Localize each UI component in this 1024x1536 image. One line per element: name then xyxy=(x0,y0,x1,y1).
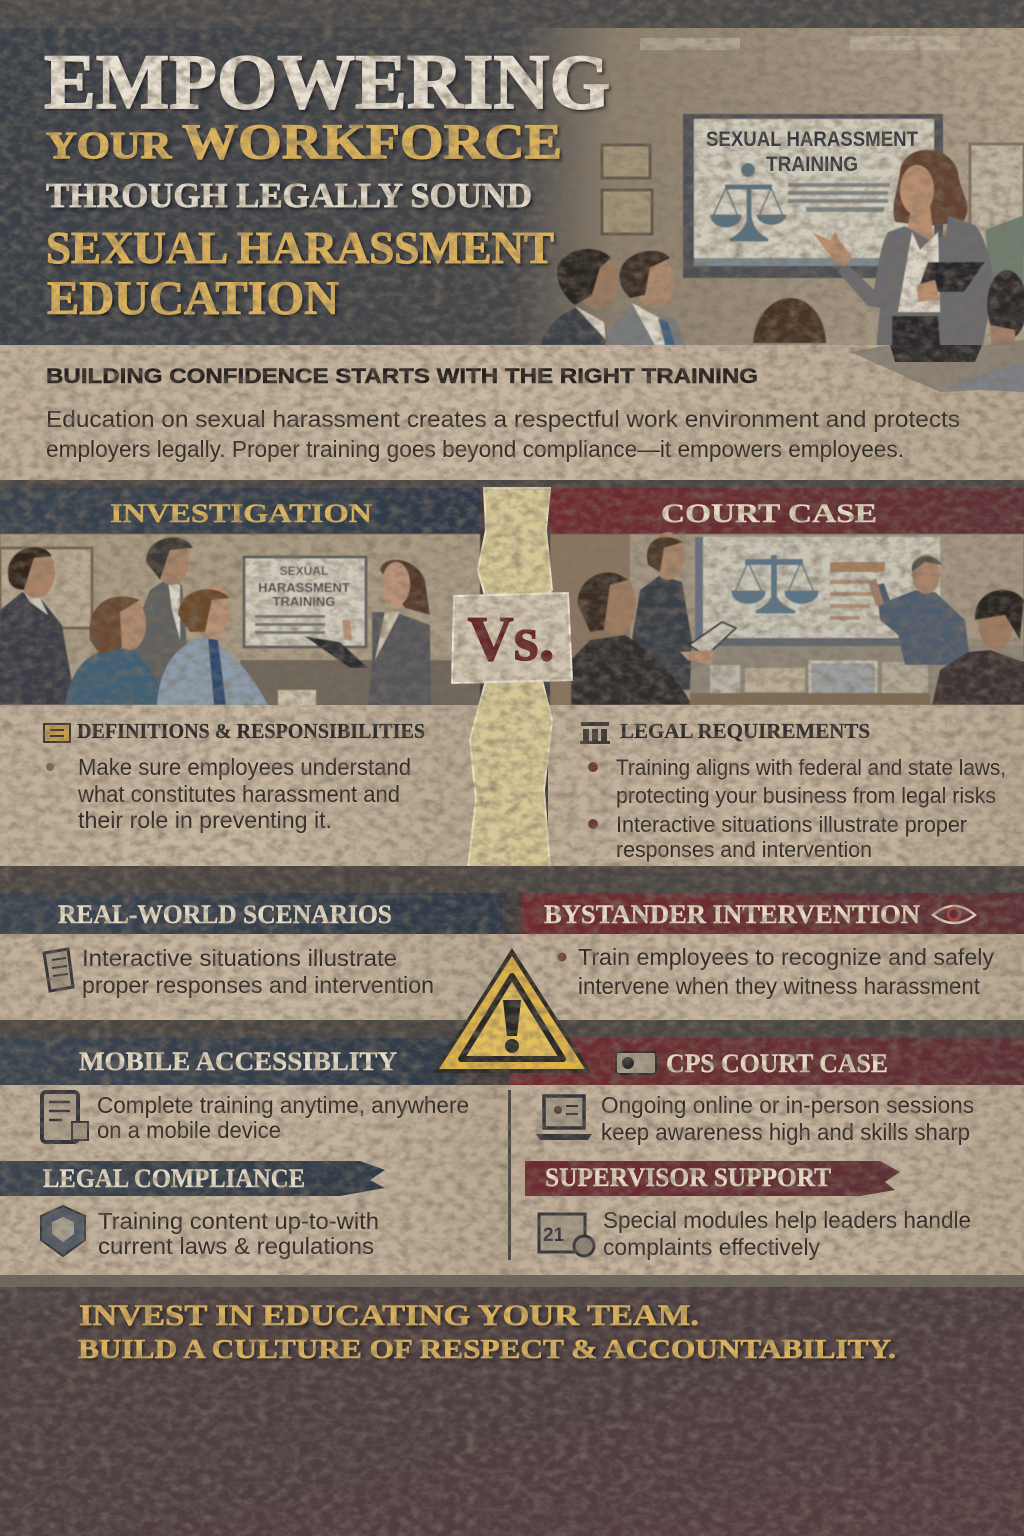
banner: cps court case xyxy=(510,1038,1024,1085)
icon: courtroom scales xyxy=(733,555,817,612)
banner: supervisor support: SUPERVISOR SUPPORT xyxy=(545,1163,831,1192)
icon: warning triangle xyxy=(433,948,592,1073)
title block xyxy=(44,38,610,325)
laptop and desk items xyxy=(810,662,876,698)
icon: calendar badge: 21 xyxy=(543,1225,565,1246)
panel text xyxy=(97,1092,469,1143)
panel text xyxy=(601,1092,974,1145)
intro heading: BUILDING CONFIDENCE STARTS WITH THE RIGHT TRAINING xyxy=(46,365,758,388)
panel text: Interactive situations illustrate proper xyxy=(616,812,967,837)
intro text: Education on sexual harassment creates a respectful work environment and protects xyxy=(46,406,960,432)
panel text: Training aligns with federal and state laws, xyxy=(616,755,1006,780)
title line: through legally sound: THROUGH LEGALLY SOUND xyxy=(46,176,532,215)
left column: investigation xyxy=(0,488,480,706)
banner: mobile accessibility xyxy=(0,1038,460,1085)
icon: courthouse xyxy=(580,722,610,744)
banner: mobile accessibility: MOBILE ACCESSIBLITY xyxy=(79,1047,397,1076)
call to action: INVEST IN EDUCATING YOUR TEAM. xyxy=(79,1299,699,1332)
panel heading: LEGAL REQUIREMENTS xyxy=(620,719,870,743)
panel text: Ongoing online or in-person sessions xyxy=(601,1092,974,1118)
panel: definitions and responsibilities xyxy=(0,705,480,868)
icon: scales xyxy=(712,163,785,240)
torn parchment divider xyxy=(468,488,552,868)
panel text: current laws & regulations xyxy=(98,1233,374,1259)
title line: Empowering: EMPOWERING xyxy=(44,38,610,125)
icon: calendar badge xyxy=(539,1214,594,1256)
panel text xyxy=(82,945,434,998)
trainer xyxy=(812,150,995,372)
banner: legal compliance xyxy=(0,1161,385,1196)
banner: BYSTANDER INTERVENTION xyxy=(544,900,920,929)
panel text xyxy=(578,944,995,999)
panel text: Train employees to recognize and safely xyxy=(578,944,995,970)
banner: court case: COURT CASE xyxy=(661,499,877,528)
banner xyxy=(0,893,502,934)
training board: HARASSMENT xyxy=(258,580,350,595)
bullet xyxy=(46,763,54,771)
training board xyxy=(244,557,366,647)
panel text xyxy=(616,755,1006,808)
illustration: trainer at whiteboard xyxy=(540,114,1024,372)
panel text: intervene when they witness harassment xyxy=(578,973,981,999)
panel text: Special modules help leaders handle xyxy=(603,1207,971,1233)
panel text: Interactive situations illustrate xyxy=(82,945,397,971)
banner: legal compliance: LEGAL COMPLIANCE xyxy=(43,1164,305,1193)
illustration: courtroom xyxy=(550,532,1024,706)
training board: TRAINING xyxy=(273,594,335,609)
intro text xyxy=(46,406,960,462)
icon: tablet xyxy=(42,1092,88,1142)
panel: legal requirements xyxy=(548,705,1024,868)
icon: shield xyxy=(41,1206,85,1256)
illustration: investigation meeting xyxy=(0,534,480,706)
title line: education: EDUCATION xyxy=(47,272,339,325)
panel text: on a mobile device xyxy=(97,1117,281,1143)
title line: your workforce: YOUR WORKFORCE xyxy=(46,113,562,169)
people xyxy=(130,578,192,705)
training board: SEXUAL xyxy=(280,564,328,578)
panel text: Training content up-to-with xyxy=(98,1208,379,1234)
whiteboard label line 2: TRAINING xyxy=(766,153,858,176)
panel text: responses and intervention xyxy=(616,837,872,862)
icon: scroll xyxy=(44,724,70,742)
header panel xyxy=(0,0,1024,372)
panel: real-world scenarios xyxy=(0,893,512,1021)
right column: court case xyxy=(550,488,1024,706)
panel: cps court case and supervisor support xyxy=(508,1038,1024,1275)
panel: mobile and legal compliance xyxy=(0,1038,510,1275)
whiteboard xyxy=(683,114,943,278)
panel text: protecting your business from legal risks xyxy=(616,783,996,808)
icon: id card xyxy=(616,1052,656,1074)
panel text xyxy=(98,1208,379,1259)
banner: investigation xyxy=(0,488,480,534)
panel text xyxy=(77,754,411,833)
bullet xyxy=(588,819,598,829)
panel text: Complete training anytime, anywhere xyxy=(97,1092,469,1118)
icon: document xyxy=(44,949,73,991)
whiteboard label: SEXUAL HARASSMENT xyxy=(706,128,918,151)
banner xyxy=(522,893,1024,934)
intro text: employers legally. Proper training goes beyond compliance—it empowers employees. xyxy=(46,436,904,462)
audience xyxy=(540,249,1024,355)
intro panel xyxy=(0,340,1024,480)
icon: eye xyxy=(933,906,975,923)
banner: REAL-WORLD SCENARIOS xyxy=(58,900,392,929)
panel: bystander intervention xyxy=(512,893,1024,1021)
title line: sexual harassment: SEXUAL HARASSMENT xyxy=(46,222,554,273)
banner: cps court case: CPS COURT CASE xyxy=(666,1049,888,1078)
panel text xyxy=(616,812,967,862)
banner: investigation: INVESTIGATION xyxy=(110,499,372,528)
banner: supervisor support xyxy=(525,1161,900,1196)
panel text: keep awareness high and skills sharp xyxy=(601,1119,970,1145)
panel text: proper responses and intervention xyxy=(82,972,434,998)
call to action: BUILD A CULTURE OF RESPECT & ACCOUNTABILITY. xyxy=(78,1334,896,1364)
panel text xyxy=(603,1207,971,1260)
versus badge xyxy=(452,593,572,683)
panel text: complaints effectively xyxy=(603,1234,820,1260)
panel text: Make sure employees understand xyxy=(78,754,411,780)
panel text: what constitutes harassment and xyxy=(77,781,400,807)
footer xyxy=(0,1275,1024,1536)
panel text: their role in preventing it. xyxy=(78,807,332,833)
call to action xyxy=(78,1299,896,1364)
banner: court case xyxy=(550,488,1024,534)
icon: laptop xyxy=(536,1096,592,1140)
panel heading: DEFINITIONS & RESPONSIBILITIES xyxy=(77,719,425,743)
versus badge: Vs. xyxy=(467,603,555,674)
bullet xyxy=(588,762,598,772)
bullet xyxy=(558,952,566,962)
